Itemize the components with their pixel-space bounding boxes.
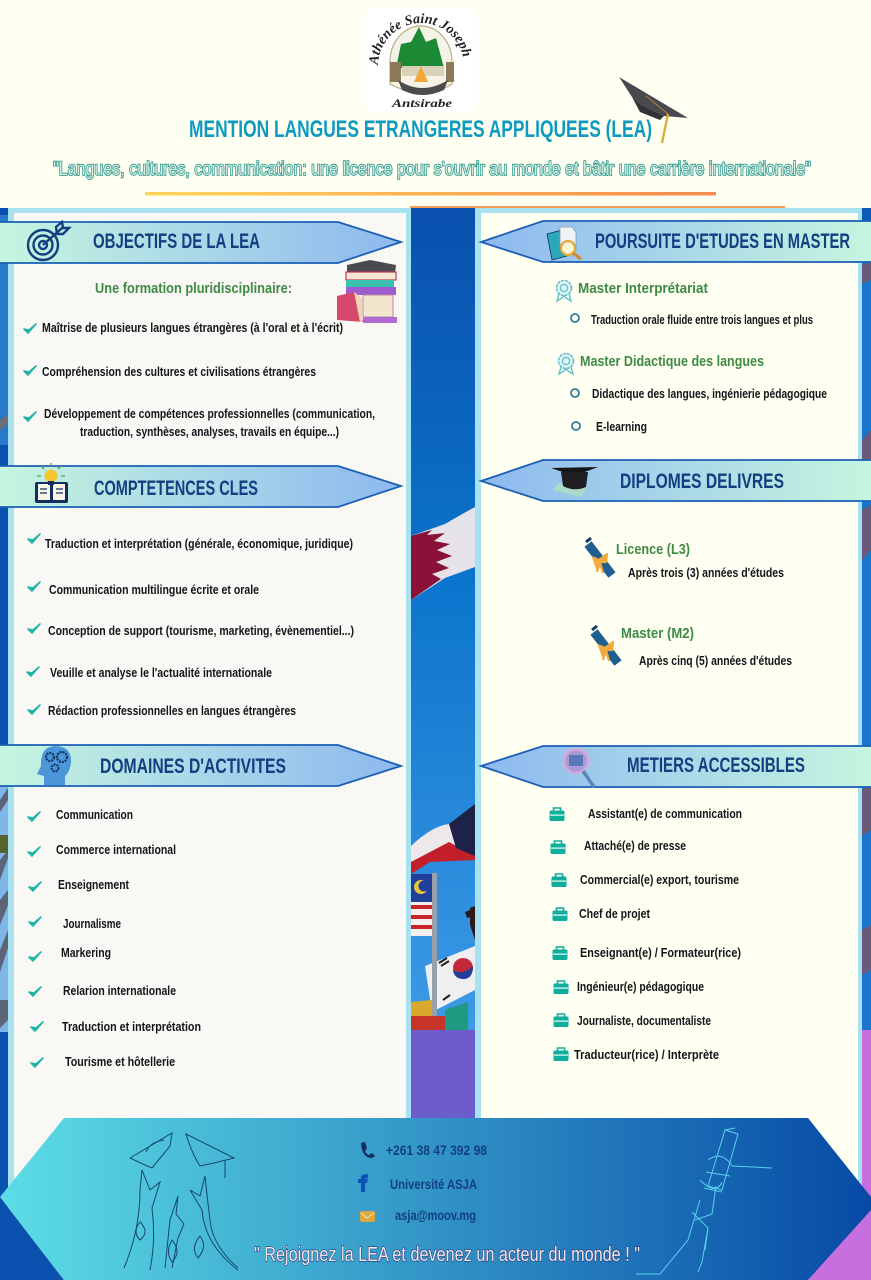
panel: right column xyxy=(475,208,862,1200)
central photo column with flags xyxy=(411,208,475,1118)
flag: Malaysia xyxy=(411,874,436,936)
icon: graduation cap with gold tassel xyxy=(619,77,688,143)
master interpretariat: Master Interprétariat xyxy=(578,280,708,297)
panel: left column xyxy=(8,208,411,1200)
checklist: domaines: Traduction et interprétation xyxy=(62,1020,201,1034)
header logo: Athénée Saint Joseph xyxy=(362,8,478,112)
master xyxy=(592,625,792,668)
checklist: domaines: Commerce international xyxy=(56,843,176,857)
ribbon heading: metiers xyxy=(481,746,871,787)
checklist: domaines: Relarion internationale xyxy=(63,984,176,998)
ribbon heading: diplomes: DIPLOMES DELIVRES xyxy=(620,470,784,493)
checklist: domaines: Communication xyxy=(56,808,133,822)
master didactique: Didactique des langues, ingénierie pédagogique xyxy=(592,387,827,401)
job list: Enseignant(e) / Formateur(rice) xyxy=(580,946,741,960)
master: Après cinq (5) années d'études xyxy=(639,654,792,668)
checklist: domaines: Journalisme xyxy=(63,917,121,931)
ribbon heading: domaines xyxy=(0,745,401,786)
checklist: domaines xyxy=(28,808,201,1069)
ribbon heading: diplomes xyxy=(481,460,871,501)
checklist: competences: Rédaction professionnelles en langues étrangères xyxy=(48,704,296,718)
checklist: objectifs xyxy=(24,321,375,439)
master didactique xyxy=(558,353,827,434)
header logo: Athénée Saint Joseph: Athénée Saint Joseph xyxy=(369,13,472,66)
master didactique: Master Didactique des langues xyxy=(580,353,764,370)
flag: South Korea xyxy=(425,946,475,1012)
checklist: competences: Conception de support (tourisme, marketing, évènementiel...) xyxy=(48,624,354,638)
purple block xyxy=(411,1030,475,1118)
icon: phone xyxy=(361,1142,375,1158)
checklist: domaines: Markering xyxy=(61,946,111,960)
header logo: Athénée Saint Joseph: Antsirabe xyxy=(391,96,453,110)
section: metiers xyxy=(481,746,871,1062)
illustration: hand holding diploma xyxy=(636,1128,772,1274)
section: poursuite d'etudes xyxy=(481,221,871,434)
ribbon heading: objectifs: OBJECTIFS DE LA LEA xyxy=(93,230,260,253)
master: Master (M2) xyxy=(621,625,694,642)
email: asja@moov.mg xyxy=(395,1207,476,1223)
right background strip xyxy=(862,208,871,1280)
job list: Chef de projet xyxy=(579,907,651,921)
job list: Commercial(e) export, tourisme xyxy=(580,873,739,887)
icon: head with gears xyxy=(37,746,71,785)
flag pole xyxy=(432,873,437,1030)
title: MENTION LANGUES ETRANGERES APPLIQUEES (LEA) xyxy=(189,116,652,143)
ribbon heading: metiers: METIERS ACCESSIBLES xyxy=(627,754,805,777)
icon: facebook xyxy=(358,1174,368,1192)
icon: magnifier with briefcase xyxy=(564,749,594,787)
flag: white red dark xyxy=(411,804,475,874)
subheading: Une formation pluridisciplinaire: xyxy=(95,280,292,297)
ribbon heading: competences xyxy=(0,466,401,507)
job list: Assistant(e) de communication xyxy=(588,807,742,821)
icon: book with light bulb xyxy=(35,463,68,503)
checklist: objectifs: Développement de compétences professionnelles (communication, xyxy=(44,407,375,421)
icon: documents and magnifier xyxy=(547,227,581,260)
checklist: competences xyxy=(27,534,354,718)
left background strip xyxy=(0,208,8,1280)
master interpretariat xyxy=(556,280,813,327)
job list xyxy=(550,807,742,1062)
footer corners xyxy=(0,1197,871,1280)
section: objectifs xyxy=(0,222,401,439)
licence xyxy=(586,538,784,580)
icon: mail xyxy=(360,1211,375,1222)
icon: target xyxy=(28,222,69,260)
checklist: domaines: Enseignement xyxy=(58,878,130,892)
illustration: hands throwing caps xyxy=(124,1133,238,1270)
job list: Ingénieur(e) pédagogique xyxy=(577,980,704,994)
checklist: competences: Communication multilingue écrite et orale xyxy=(49,583,259,597)
closing quote: " Rejoignez la LEA et devenez un acteur du monde ! " xyxy=(254,1244,640,1266)
ribbon heading: domaines: DOMAINES D'ACTIVITES xyxy=(100,755,286,778)
flag: Qatar xyxy=(411,507,475,600)
header divider xyxy=(145,192,716,196)
checklist: objectifs: Compréhension des cultures et civilisations étrangères xyxy=(42,365,316,379)
section: domaines xyxy=(0,745,401,1069)
icon: stack of books xyxy=(337,260,397,323)
section: competences xyxy=(0,463,401,718)
checklist: competences: Traduction et interprétation (générale, économique, juridique) xyxy=(45,537,353,551)
checklist: competences: Veuille et analyse le l'actualité internationale xyxy=(50,666,272,680)
job list: Journaliste, documentaliste xyxy=(577,1014,711,1028)
job list: Traducteur(rice) / Interprète xyxy=(574,1048,719,1062)
job list: Attaché(e) de presse xyxy=(584,839,686,853)
licence: Après trois (3) années d'études xyxy=(628,566,784,580)
master didactique: E-learning xyxy=(596,420,647,434)
checklist: domaines: Tourisme et hôtellerie xyxy=(65,1055,175,1069)
ribbon heading: objectifs xyxy=(0,222,401,263)
facebook name: Université ASJA xyxy=(390,1176,477,1192)
icon: cap and diploma xyxy=(551,467,598,497)
ribbon heading: competences: COMPTETENCES CLES xyxy=(94,477,258,500)
ribbon heading: master xyxy=(481,221,871,262)
phone number: +261 38 47 392 98 xyxy=(386,1142,487,1158)
section: diplomes xyxy=(481,460,871,668)
footer banner xyxy=(0,1118,871,1280)
flag base colours xyxy=(411,906,475,1030)
checklist: objectifs: Maîtrise de plusieurs langues étrangères (à l'oral et à l'écrit) xyxy=(42,321,343,335)
checklist: objectifs: traduction, synthèses, analyses, travails en équipe...) xyxy=(80,425,339,439)
licence: Licence (L3) xyxy=(616,541,690,558)
